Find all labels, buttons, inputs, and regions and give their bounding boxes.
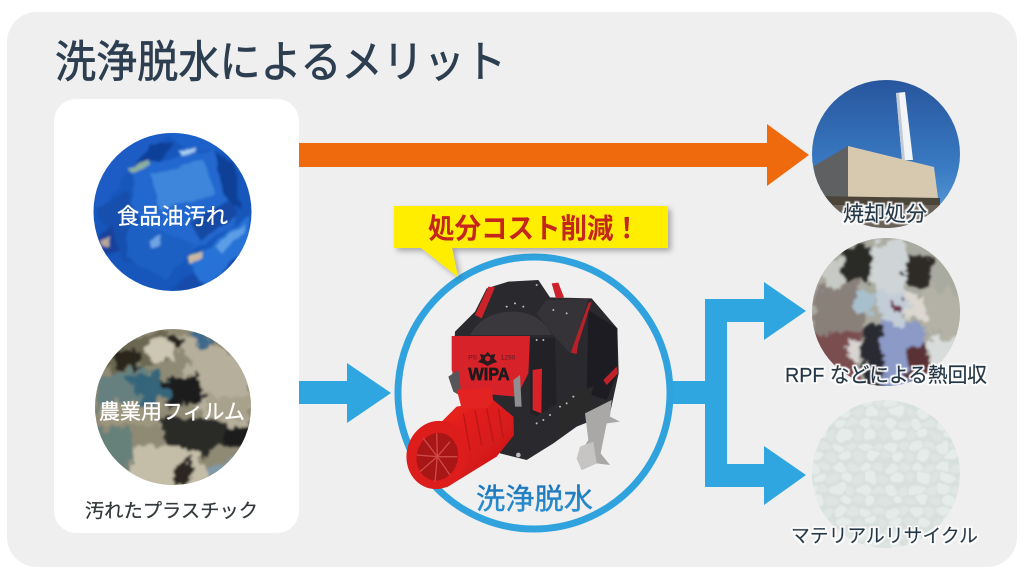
- machine logo: WIPA: [468, 364, 510, 384]
- title: 洗浄脱水によるメリット: [55, 38, 506, 87]
- panel: dirty plastics: [54, 99, 299, 533]
- photo: RPF shredded plastic: [810, 236, 962, 392]
- machine illustration: PS: [468, 354, 478, 361]
- arrow: orange to incineration: [299, 124, 809, 186]
- label: dirty plastics: 汚れたプラスチック: [85, 500, 258, 522]
- arrow: branching to recovery routes: [672, 282, 806, 505]
- label: incineration: 焼却処分: [843, 203, 927, 226]
- callout: disposal cost reduction: [394, 206, 668, 277]
- photo: plastic pellets: [812, 400, 960, 548]
- callout: disposal cost reduction: 処分コスト削減！: [428, 213, 640, 244]
- machine illustration: 1250: [501, 354, 516, 361]
- label: dewatering: 洗浄脱水: [476, 483, 593, 516]
- label: food oil stains: 食品油汚れ: [117, 204, 228, 229]
- label: RPF heat recovery: RPF などによる熱回収: [785, 364, 987, 387]
- machine illustration: [399, 280, 620, 496]
- dewatering machine circle: [398, 257, 670, 529]
- label: material recycling: マテリアルリサイクル: [791, 525, 978, 547]
- label: agricultural film: 農業用フィルム: [99, 401, 245, 424]
- photo: incineration plant: [810, 78, 962, 235]
- photo: food oil stained plastic: [90, 130, 255, 295]
- arrow: blue to dewatering machine: [299, 363, 391, 423]
- photo: agricultural film: [92, 326, 254, 490]
